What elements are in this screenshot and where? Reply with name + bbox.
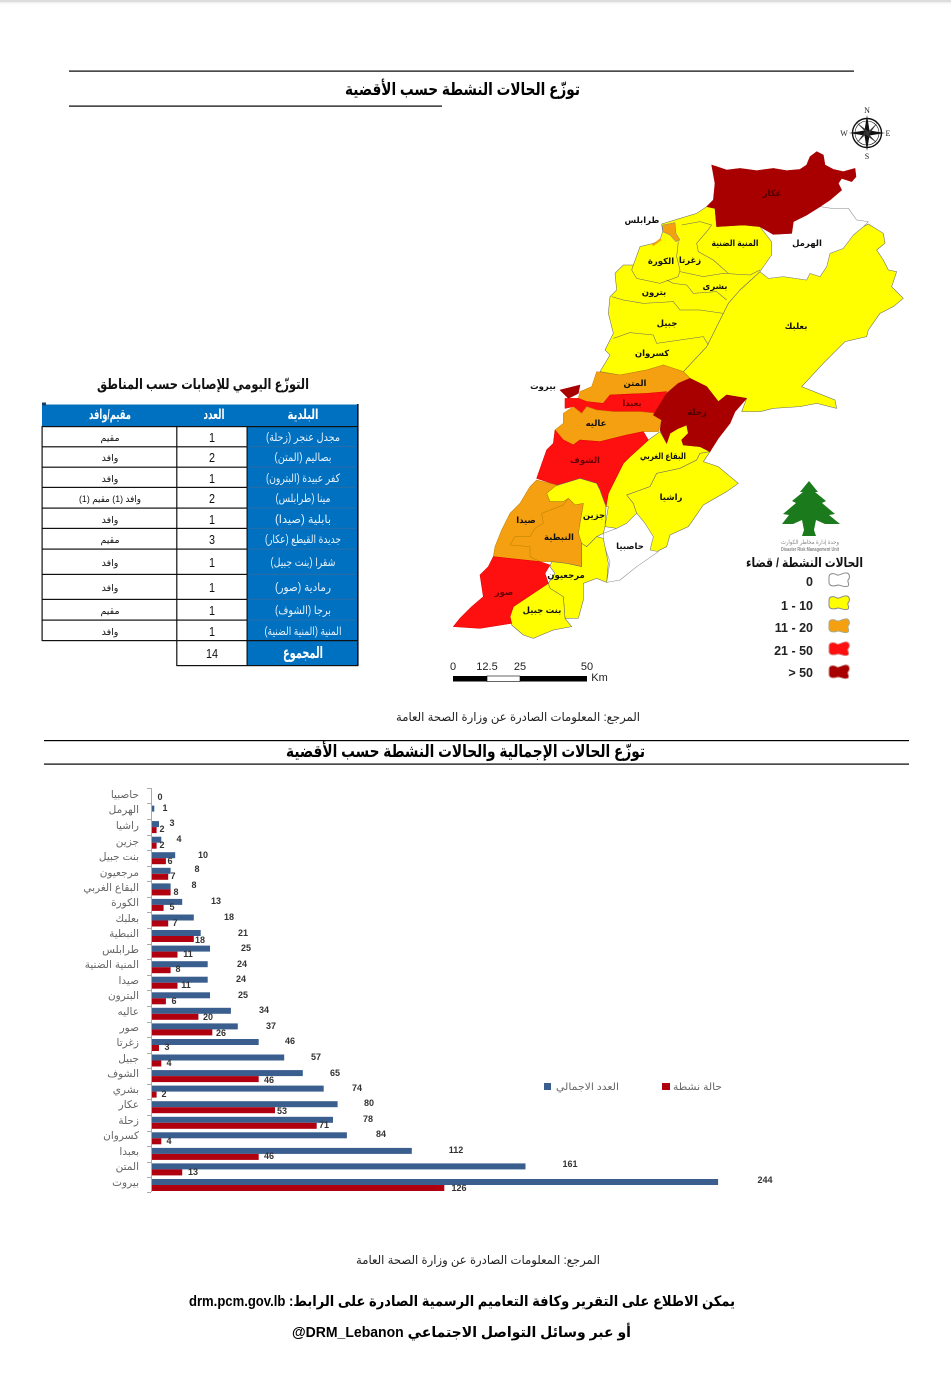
- chart category labels: بعبدا: [119, 1146, 139, 1158]
- chart total value labels: 3: [169, 818, 175, 828]
- chart category labels: كسروان: [103, 1130, 139, 1142]
- table rows text: وافد: [102, 558, 118, 569]
- chart category labels: الهرمل: [109, 804, 139, 816]
- chart category labels: [83, 789, 139, 1189]
- chart total value labels: 1: [162, 803, 168, 813]
- chart category labels: البترون: [108, 990, 139, 1002]
- map district labels: [494, 188, 822, 615]
- chart active value labels: 13: [188, 1167, 198, 1177]
- table header row: العدد: [204, 406, 224, 422]
- table rows text: 1: [209, 555, 215, 570]
- chart active value labels: 11: [183, 949, 193, 959]
- chart active value labels: 3: [164, 1042, 170, 1052]
- map district labels: بعبدا: [622, 398, 642, 408]
- chart active value labels: 71: [319, 1120, 329, 1130]
- chart legend: [544, 1082, 722, 1093]
- table header row: مقيم/وافد: [89, 406, 131, 423]
- chart active value labels: 4: [166, 1058, 172, 1068]
- table rows text: وافد: [102, 583, 118, 594]
- chart category labels: الشوف: [107, 1068, 139, 1080]
- table blue first column: [247, 426, 357, 666]
- chart active value labels: 6: [171, 996, 177, 1006]
- map district labels: بيروت: [530, 381, 556, 392]
- chart active value labels: 8: [175, 964, 181, 974]
- chart total value labels: 24: [237, 959, 247, 969]
- bar chart: total vs active cases by district: [83, 788, 773, 1193]
- table rows text: 1: [209, 580, 215, 595]
- source note: chart section: المرجع: المعلومات الصادرة عن وزارة الصحة العامة: [356, 1253, 600, 1268]
- chart active value labels: 126: [451, 1183, 467, 1193]
- table rows text: [79, 430, 342, 662]
- map south part: [453, 365, 747, 638]
- table rows text: المجموع: [283, 645, 323, 662]
- chart category labels: بعلبك: [116, 913, 139, 925]
- map district labels: طرابلس: [625, 215, 659, 226]
- chart category labels: زحلة: [118, 1115, 139, 1127]
- chart total value labels: 13: [211, 896, 221, 906]
- legend: active cases per district: 21 - 50: [774, 644, 813, 658]
- chart category labels: طرابلس: [102, 944, 139, 956]
- chart total value labels: 24: [236, 974, 246, 984]
- legend: active cases per district: [746, 555, 863, 680]
- chart total value labels: 74: [352, 1083, 362, 1093]
- chart active value labels: 6: [167, 856, 173, 866]
- table rows text: وافد (1) مقيم (1): [79, 494, 141, 505]
- chart active value labels: [159, 824, 467, 1193]
- source note: map section: المرجع: المعلومات الصادرة عن وزارة الصحة العامة: [396, 710, 640, 725]
- chart category labels: عكار: [118, 1099, 139, 1111]
- table rows text: وافد: [102, 627, 118, 638]
- chart category labels: بيروت: [112, 1177, 139, 1189]
- chart total value labels: 80: [364, 1098, 374, 1108]
- chart legend: العدد الاجمالي: [556, 1082, 619, 1093]
- icon: compass rose: S: [865, 152, 869, 161]
- chart active value labels: 7: [170, 871, 176, 881]
- chart category labels: بنت جبيل: [99, 851, 139, 863]
- chart total value labels: 25: [238, 990, 248, 1000]
- chart total value labels: [157, 792, 773, 1185]
- chart total value labels: 0: [157, 792, 163, 802]
- map north part: [600, 152, 903, 412]
- legend: active cases per district: > 50: [788, 666, 813, 680]
- chart active value labels: 20: [203, 1012, 213, 1022]
- chart active value labels: 7: [172, 918, 178, 928]
- map district labels: الشوف: [570, 455, 600, 466]
- chart total value labels: 65: [330, 1068, 340, 1078]
- table rows text: 1: [209, 624, 215, 639]
- legend: active cases per district: 1 - 10: [781, 599, 813, 613]
- chart category labels: راشيا: [116, 820, 139, 832]
- icon: cedar logo: [781, 481, 840, 553]
- footer links text: أو عبر وسائل التواصل الاجتماعي ⁦@DRM_Lebanon⁩: [292, 1323, 631, 1341]
- table rows text: 1: [209, 512, 215, 527]
- map district labels: عاليه: [586, 418, 606, 428]
- icon: cedar logo: وحدة إدارة مخاطر الكوارث: [781, 539, 839, 546]
- title: chart section heading: توزّع الحالات الإجمالية والحالات النشطة حسب الأقضية: [286, 741, 645, 762]
- chart red bars: active: [152, 827, 444, 1191]
- chart active value labels: 2: [159, 840, 165, 850]
- table header row: البلدية: [288, 406, 318, 422]
- chart category labels: البقاع الغربي: [83, 882, 139, 894]
- map district labels: بترون: [642, 287, 666, 298]
- chart total value labels: 21: [238, 928, 248, 938]
- chart active value labels: 5: [169, 902, 175, 912]
- table rows text: مجدل عنجر (زحلة): [266, 432, 340, 445]
- map district labels: المنية الضنية: [712, 238, 759, 248]
- chart total value labels: 10: [198, 850, 208, 860]
- map district labels: صيدا: [516, 515, 536, 525]
- chart total value labels: 46: [285, 1036, 295, 1046]
- table rows text: وافد: [102, 474, 118, 485]
- chart total value labels: 244: [757, 1175, 773, 1185]
- map district labels: زحلة: [687, 407, 707, 418]
- icon: cedar logo: Disaster Risk Management Unit: [781, 547, 839, 553]
- chart category labels: مرجعيون: [100, 867, 139, 879]
- map district labels: بنت جبيل: [523, 605, 561, 615]
- chart active value labels: 46: [264, 1151, 274, 1161]
- table rows text: مقيم: [100, 433, 120, 444]
- chart active value labels: 11: [181, 980, 191, 990]
- chart blue bars: total: [152, 806, 718, 1185]
- map district labels: الهرمل: [792, 238, 822, 249]
- chart category labels: النبطية: [109, 928, 139, 940]
- map district labels: المتن: [624, 378, 647, 389]
- chart total value labels: 161: [562, 1159, 578, 1169]
- chart active value labels: 2: [161, 1089, 167, 1099]
- chart active value labels: 2: [159, 824, 165, 834]
- map: active cases by district: [453, 152, 903, 638]
- chart category labels: جبيل: [118, 1053, 139, 1065]
- table rows text: وافد: [102, 453, 118, 464]
- table rows text: 1: [209, 430, 215, 445]
- scale bar: 25: [514, 661, 526, 673]
- chart category labels: حاصبيا: [111, 789, 139, 801]
- map district labels: بعلبك: [785, 321, 807, 331]
- chart category labels: جزين: [116, 836, 139, 848]
- map district labels: جبيل: [657, 318, 677, 328]
- chart total value labels: 78: [363, 1114, 373, 1124]
- footer links text: [189, 1294, 735, 1341]
- chart total value labels: 8: [191, 880, 197, 890]
- chart total value labels: 37: [266, 1021, 276, 1031]
- map district labels: زغرتا: [679, 255, 701, 266]
- chart total value labels: 8: [194, 864, 200, 874]
- chart total value labels: 57: [311, 1052, 321, 1062]
- table rows text: وافد: [102, 515, 118, 526]
- map district labels: الكورة: [648, 256, 674, 267]
- chart active value labels: 46: [264, 1075, 274, 1085]
- scale bar: 50: [581, 661, 593, 673]
- chart category labels: بشري: [113, 1084, 139, 1096]
- chart total value labels: 112: [449, 1145, 463, 1155]
- chart total value labels: 18: [224, 912, 234, 922]
- chart category labels: عاليه: [118, 1006, 139, 1018]
- icon: compass rose: [840, 106, 891, 161]
- table rows text: شقرا (بنت جبيل): [270, 557, 336, 570]
- chart total value labels: 84: [376, 1129, 386, 1139]
- title: map section heading: توزّع الحالات النشطة حسب الأقضية: [345, 79, 580, 100]
- map district labels: البقاع الغربي: [640, 451, 686, 462]
- table rows text: جديدة القيطع (عكار): [265, 534, 341, 547]
- chart category labels: صور: [119, 1022, 139, 1034]
- table header row: [42, 402, 358, 426]
- legend: active cases per district: 0: [806, 575, 813, 589]
- map district labels: النبطية: [544, 532, 574, 542]
- table rows text: 2: [209, 491, 215, 506]
- table rows text: المنية (المنية الضنية): [264, 626, 342, 638]
- table rows text: بصاليم (المتن): [274, 452, 332, 465]
- scale bar: [450, 661, 608, 684]
- chart active value labels: 4: [166, 1136, 172, 1146]
- chart active value labels: 8: [173, 887, 179, 897]
- chart active value labels: 53: [277, 1106, 287, 1116]
- chart category labels: المنية الضنية: [85, 959, 139, 971]
- map district labels: حاصبيا: [616, 541, 644, 551]
- table rows text: 14: [206, 646, 218, 661]
- map district labels: مرجعيون: [547, 570, 585, 581]
- table rows text: 1: [209, 603, 215, 618]
- map district labels: صور: [494, 587, 513, 598]
- chart category labels: صيدا: [118, 975, 139, 987]
- table rows text: مقيم: [100, 606, 120, 617]
- chart category labels: المتن: [116, 1161, 139, 1173]
- table rows text: رمادية (صور): [275, 582, 331, 595]
- legend: active cases per district: 11 - 20: [775, 621, 813, 635]
- icon: compass rose: N: [864, 106, 870, 115]
- table rows text: 3: [209, 532, 215, 547]
- map district labels: بشرى: [703, 281, 727, 292]
- table rows text: مقيم: [100, 535, 120, 546]
- map district labels: كسروان: [635, 348, 669, 359]
- chart active value labels: 26: [216, 1028, 226, 1038]
- chart category labels: الكورة: [111, 897, 139, 909]
- table heading: التوزّع اليومي للإصابات حسب المناطق: [97, 377, 309, 393]
- map district labels: عكار: [762, 188, 781, 199]
- chart legend: حالة نشطة: [673, 1082, 722, 1093]
- table rows text: مينا (طرابلس): [276, 493, 330, 506]
- table rows text: بابلية (صيدا): [275, 514, 331, 526]
- icon: compass rose: E: [886, 129, 891, 138]
- legend: active cases per district: الحالات النشطة / قضاء: [746, 555, 863, 570]
- icon: compass rose: W: [840, 129, 848, 138]
- chart total value labels: 4: [176, 834, 182, 844]
- map district labels: جزين: [583, 510, 605, 521]
- table rows text: برجا (الشوف): [275, 605, 331, 618]
- chart total value labels: 34: [259, 1005, 269, 1015]
- scale bar: 12.5: [476, 661, 498, 673]
- table rows text: 2: [209, 450, 215, 465]
- chart total value labels: 25: [241, 943, 251, 953]
- table rows text: 1: [209, 471, 215, 486]
- table: daily cases by area: [42, 377, 359, 666]
- chart axis: [147, 788, 152, 1193]
- footer links text: يمكن الاطلاع على التقرير وكافة التعاميم الرسمية الصادرة على الرابط: drm.pcm.gov.lb: [189, 1294, 735, 1310]
- map district labels: راشيا: [660, 492, 683, 503]
- chart active value labels: 18: [195, 935, 205, 945]
- chart category labels: زغرتا: [117, 1037, 139, 1049]
- table rows text: كفر عبيدة (البترون): [266, 473, 340, 486]
- scale bar: Km: [591, 672, 608, 684]
- scale bar: 0: [450, 661, 456, 673]
